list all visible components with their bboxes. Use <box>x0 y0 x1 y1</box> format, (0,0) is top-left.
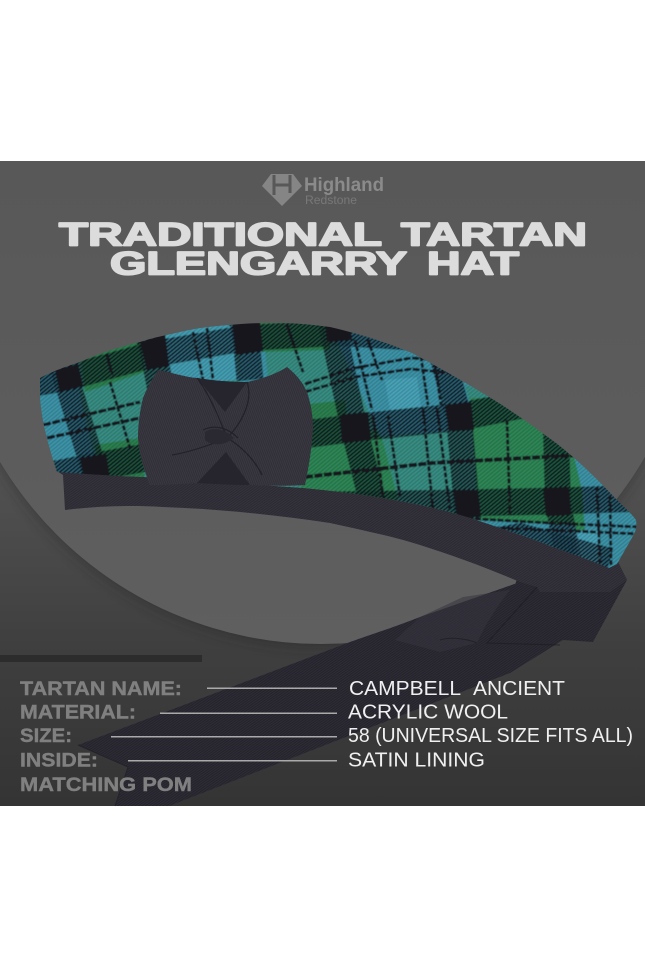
black squares <box>55 322 571 517</box>
spec: tartan name: ANCIENT <box>473 678 565 700</box>
icon: diamond logo mark <box>262 174 302 206</box>
spec: material <box>20 702 508 724</box>
spec: tartan name <box>20 678 565 700</box>
spec: inside: INSIDE: <box>20 750 98 772</box>
green and teal cells <box>36 318 645 580</box>
spec: material: MATERIAL: <box>20 702 136 724</box>
logo wordmark: Highland <box>304 175 384 196</box>
spec: size <box>20 725 633 747</box>
spec: material: ACRYLIC WOOL <box>348 702 508 724</box>
title: GLENGARRY <box>110 246 407 282</box>
spec: size: SIZE: <box>20 725 72 747</box>
title: TRADITIONAL <box>59 216 382 252</box>
background disc <box>0 444 645 644</box>
infographic canvas <box>0 161 645 806</box>
spec: inside: SATIN LINING <box>348 750 485 772</box>
spec: matching pom: MATCHING POM <box>20 774 192 796</box>
title <box>59 216 587 282</box>
hat <box>40 323 636 587</box>
hatched tartan rows <box>20 333 645 560</box>
tartan crown <box>40 323 636 568</box>
thin tartan lines <box>43 325 640 565</box>
divider bar <box>0 655 202 662</box>
title: HAT <box>427 246 520 282</box>
spec: tartan name: TARTAN NAME: <box>20 678 182 700</box>
hat brim band <box>57 471 627 592</box>
spec: tartan name: CAMPBELL <box>349 678 461 700</box>
logo <box>262 174 384 207</box>
logo sub-wordmark: Redstone <box>305 195 357 207</box>
background panel <box>0 161 645 806</box>
hatched tartan columns <box>58 310 570 570</box>
specs list <box>20 678 633 796</box>
bow <box>138 367 313 486</box>
title: TARTAN <box>401 216 587 252</box>
spec: size: 58 (UNIVERSAL SIZE FITS ALL) <box>348 725 633 747</box>
hat tail ribbon <box>78 560 627 806</box>
spec: inside <box>20 750 485 772</box>
light twill on all cloth <box>40 323 636 568</box>
